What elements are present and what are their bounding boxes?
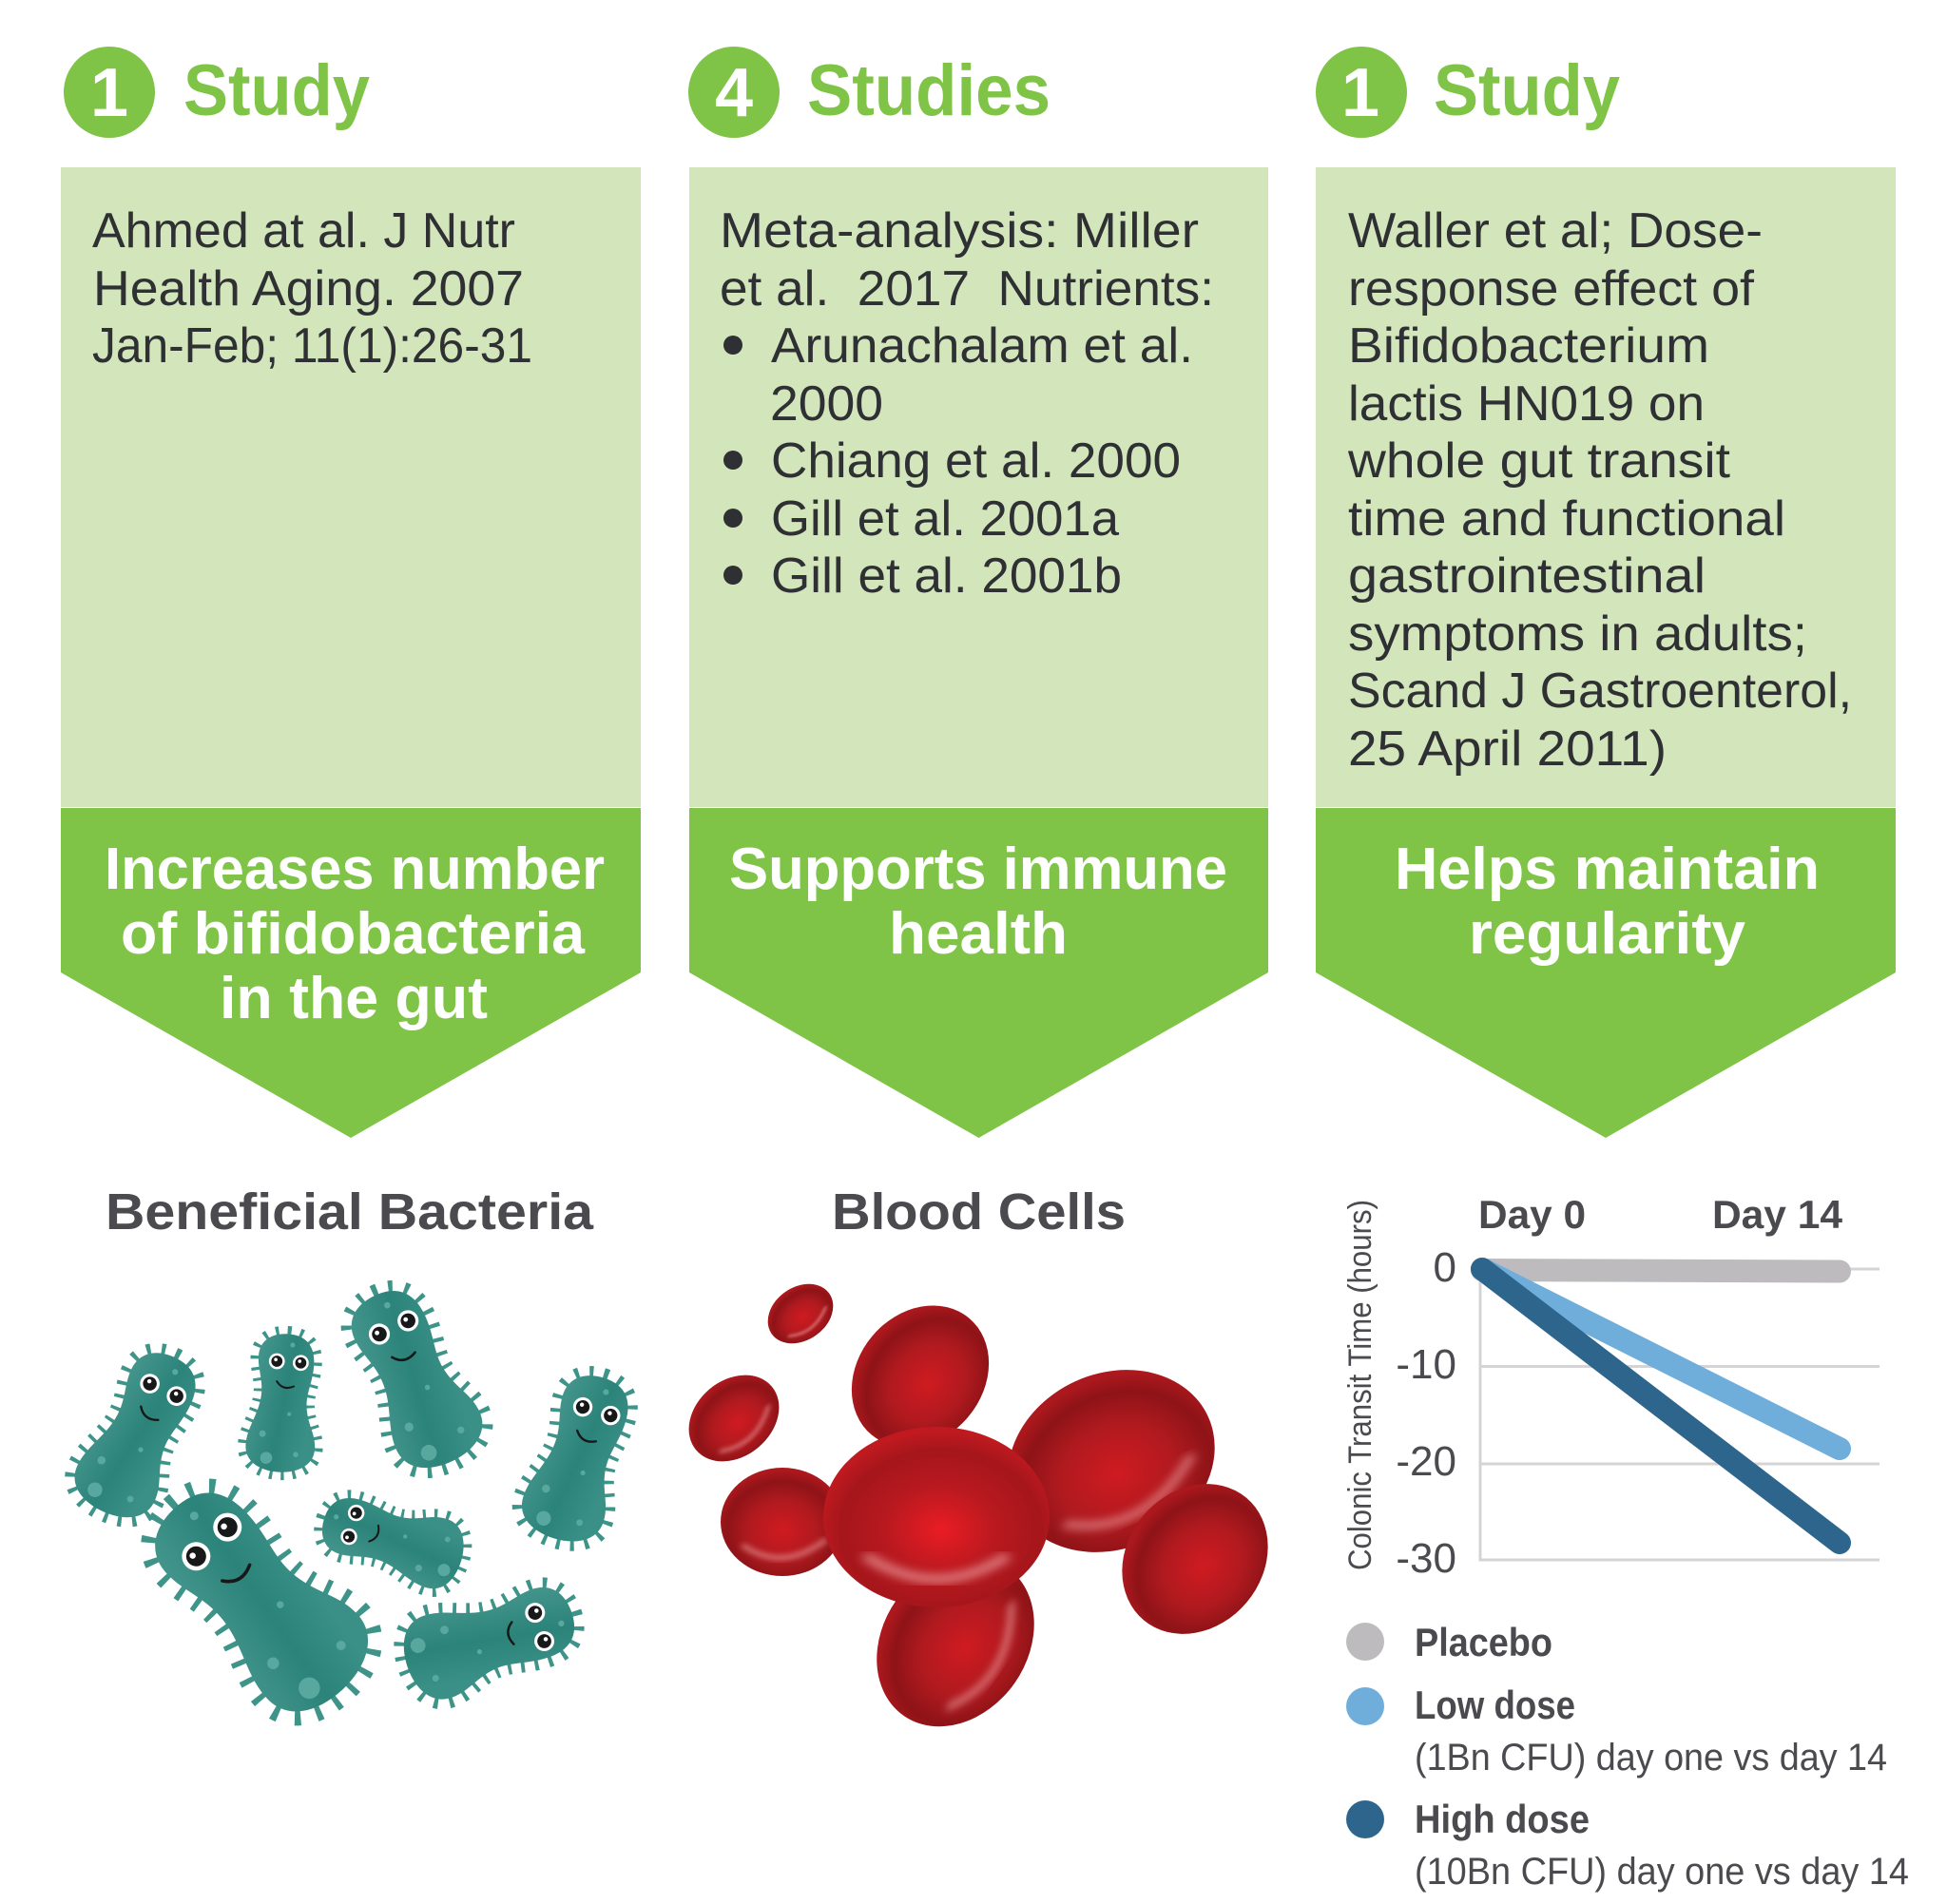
reference text: time and functional [1348,491,1785,547]
column labels [1478,1192,1843,1237]
heading: Study: Study [1434,50,1620,131]
banner text: regularity [1469,901,1746,967]
legend: high dose: High dose [1415,1797,1590,1841]
reference panel [1316,167,1896,807]
cell small top [757,1272,844,1356]
legend: low dose: (1Bn CFU) day one vs day 14 [1415,1737,1887,1779]
bacterium 7 [394,1572,586,1707]
reference text: symptoms in adults; [1348,606,1807,662]
high dose line [1482,1269,1840,1543]
y axis title: Colonic Transit Time (hours) [1342,1200,1378,1570]
panel: study column 2 [688,47,1268,1138]
count badge 1 [64,47,155,138]
banner text [729,837,1227,967]
cell bottom [844,1527,1067,1757]
panel: study column 3 [1316,47,1896,1138]
reference text [92,203,532,374]
bacterium 1 [65,1339,213,1529]
legend: placebo [1346,1620,1552,1664]
placebo line [1482,1270,1840,1272]
reference text: whole gut transit [1347,433,1731,489]
column labels: Day 0 [1478,1192,1586,1237]
reference panel [61,167,641,807]
column labels: Day 14 [1712,1192,1843,1237]
reference text: Scand J Gastroenterol, [1348,664,1852,719]
illustration: blood cells [671,1272,1298,1757]
banner text: health [889,901,1068,967]
cell small left [671,1357,797,1479]
heading: Study: Study [183,50,370,131]
cell left [721,1468,844,1576]
bacterium 3 [334,1276,493,1481]
y axis values: -20 [1396,1438,1456,1485]
panel: study column 1 [61,47,641,1138]
reference text: Gill et al. 2001a [771,491,1119,547]
reference text: response effect of [1348,261,1755,317]
reference text: Gill et al. 2001b [771,548,1122,604]
heading: Studies: Studies [807,50,1051,131]
count badge 1 [1316,47,1407,138]
reference text [1347,203,1852,777]
reference text: Bifidobacterium [1348,318,1709,374]
banner text [105,837,605,1031]
cell right large [978,1337,1244,1586]
banner text [1395,837,1820,967]
bacterium 2 [244,1332,322,1474]
legend: high dose [1346,1797,1909,1893]
bacterium 6 [314,1485,472,1595]
cell centre [823,1427,1050,1607]
reference text: 25 April 2011) [1348,721,1667,777]
count badge 1: 1 [1341,55,1379,131]
reference text: Jan-Feb; 11(1):26-31 [92,318,532,374]
reference panel [689,167,1268,807]
chart: colonic transit time [1342,1192,1880,1582]
bacterium 5 [129,1467,388,1731]
banner text: Helps maintain [1395,837,1820,902]
legend: low dose [1346,1683,1887,1779]
reference text: 2000 [770,376,883,432]
reference text: Ahmed at al. J Nutr [92,203,515,259]
banner text: Increases number [105,837,605,902]
low dose line [1482,1269,1840,1449]
reference text: et al. 2017 Nutrients: [720,261,1214,317]
count badge 4 [688,47,780,138]
reference text: lactis HN019 on [1348,376,1705,432]
legend: placebo: Placebo [1415,1620,1552,1664]
count badge 1: 1 [90,55,128,131]
legend: low dose: Low dose [1415,1683,1575,1727]
green arrow banner [1316,808,1896,1138]
banner text: in the gut [220,966,488,1031]
heading: Beneficial Bacteria: Beneficial Bacteria [106,1183,594,1240]
reference text: gastrointestinal [1348,548,1706,604]
reference text: Waller et al; Dose- [1348,203,1763,259]
reference text: Health Aging. 2007 [93,261,524,317]
legend [1346,1620,1909,1893]
y axis values: -10 [1396,1341,1456,1388]
illustration: bacteria [65,1276,644,1731]
heading: Blood Cells: Blood Cells [832,1183,1126,1240]
reference text: Meta-analysis: Miller [720,203,1199,259]
reference text [720,203,1214,604]
legend: high dose: (10Bn CFU) day one vs day 14 [1415,1851,1909,1893]
count badge 4: 4 [715,55,753,131]
green arrow banner [61,808,641,1138]
cell upper [823,1278,1017,1475]
reference text: Arunachalam et al. [771,318,1193,374]
y axis values [1396,1244,1456,1582]
green arrow banner [689,808,1268,1138]
banner text: of bifidobacteria [121,901,586,967]
banner text: Supports immune [729,837,1227,902]
cell right [1092,1454,1298,1664]
reference text: Chiang et al. 2000 [771,433,1181,489]
y axis values: -30 [1396,1535,1456,1582]
y axis values: 0 [1434,1244,1456,1291]
bacterium 4 [514,1366,644,1550]
